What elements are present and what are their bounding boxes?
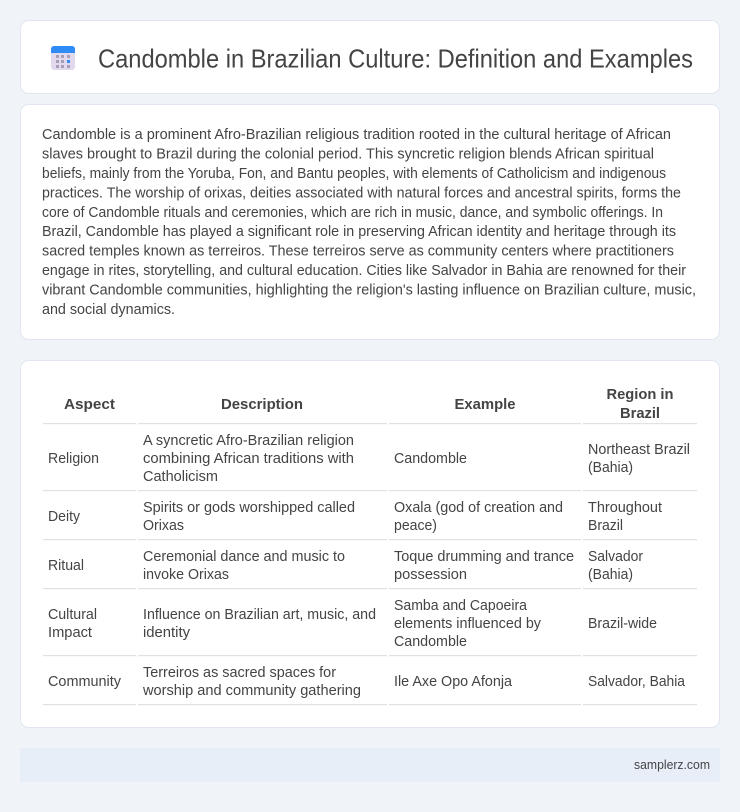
title: Candomble in Brazilian Culture: Definition and Examples (98, 46, 693, 74)
panel: table (20, 360, 720, 728)
table row: Deity: Oxala (god of creation and (394, 500, 563, 516)
table row: Community: Salvador, Bahia (588, 674, 685, 690)
table row: Religion: combining African traditions with (143, 451, 354, 467)
text block: introduction paragraph: Brazil, Candomble has played a significant role in preserving African identity and heritage through its (42, 224, 676, 240)
table row: Religion: Religion (48, 451, 99, 467)
table row: Deity: Spirits or gods worshipped called (143, 500, 355, 516)
footer bar (20, 748, 720, 782)
table row: Ritual: Ceremonial dance and music to (143, 549, 345, 565)
icon: calendar (51, 46, 75, 70)
table row: Deity: Orixas (143, 518, 184, 534)
table row: Ritual: invoke Orixas (143, 567, 229, 583)
table row: Ritual: Ritual (48, 558, 84, 574)
table header row: Region in (606, 386, 674, 403)
table header row (64, 386, 674, 422)
table row: Community (48, 665, 685, 699)
table row: Community: Community (48, 674, 122, 690)
table header row: Description (221, 396, 303, 413)
table row: Ritual: Salvador (588, 549, 643, 565)
table row: Religion: (Bahia) (588, 460, 633, 476)
text block: introduction paragraph (42, 127, 696, 318)
text block: introduction paragraph: core of Candomble rituals and ceremonies, which are rich in music, dance, and symbolic offerings. In (42, 205, 663, 221)
table header row: Brazil (620, 405, 660, 422)
table row: Cultural Impact: Candomble (394, 634, 467, 650)
table header row: Example (454, 396, 516, 413)
table row: Ritual (48, 549, 643, 583)
table row: Community: Ile Axe Opo Afonja (394, 674, 512, 690)
footer: source credit: samplerz.com (634, 758, 710, 772)
table row: Religion: Candomble (394, 451, 467, 467)
table row rules (43, 423, 697, 705)
panel: title header (20, 20, 720, 94)
table row: Deity: Throughout (588, 500, 662, 516)
table header row: Aspect (64, 396, 115, 413)
table row: Cultural Impact: Influence on Brazilian art, music, and (143, 607, 376, 623)
text block: introduction paragraph: vibrant Candomble communities, highlighting the religion's lasting influence on Brazilian culture, music, (42, 282, 696, 298)
table row: Deity: Brazil (588, 518, 623, 534)
table row: Cultural Impact: Brazil-wide (588, 616, 657, 632)
text block: introduction paragraph: sacred temples known as terreiros. These terreiros serve as community centers where practitioners (42, 244, 674, 260)
text block: introduction paragraph: Candomble is a prominent Afro-Brazilian religious tradition rooted in the cultural heritage of African (42, 127, 671, 143)
table row: Cultural Impact: Impact (48, 625, 92, 641)
table row: Religion: Catholicism (143, 469, 218, 485)
table row: Ritual: possession (394, 567, 467, 583)
table row: Cultural Impact: elements influenced by (394, 616, 542, 632)
table row: Religion: A syncretic Afro-Brazilian religion (143, 433, 354, 449)
table row: Cultural Impact: identity (143, 625, 191, 641)
table row: Deity (48, 500, 662, 534)
text block: introduction paragraph: and social dynamics. (42, 302, 175, 318)
text block: introduction paragraph: engage in rites, storytelling, and cultural education. Cities like Salvador in Bahia are renowned for their (42, 263, 686, 279)
table row: Ritual: (Bahia) (588, 567, 633, 583)
table row: Religion (48, 433, 690, 485)
table row: Deity: peace) (394, 518, 437, 534)
text block: introduction paragraph: practices. The worship of orixas, deities associated with natural forces and ancestral spirits, forms the (42, 185, 681, 201)
table row: Community: Terreiros as sacred spaces for (143, 665, 336, 681)
text block: introduction paragraph: beliefs, mainly from the Yoruba, Fon, and Bantu peoples, with elements of Catholicism and indigenous (42, 166, 666, 182)
table row: Religion: Northeast Brazil (588, 442, 690, 458)
text block: introduction paragraph: slaves brought to Brazil during the colonial period. This syncretic religion blends African spiritual (42, 146, 654, 162)
table row: Cultural Impact: Cultural (48, 607, 97, 623)
panel: introduction (20, 104, 720, 340)
table row: Deity: Deity (48, 509, 81, 525)
table row: Cultural Impact: Samba and Capoeira (394, 598, 527, 614)
table row: Ritual: Toque drumming and trance (394, 549, 574, 565)
table row: Cultural Impact (48, 598, 657, 650)
table row: Community: worship and community gathering (142, 683, 361, 699)
